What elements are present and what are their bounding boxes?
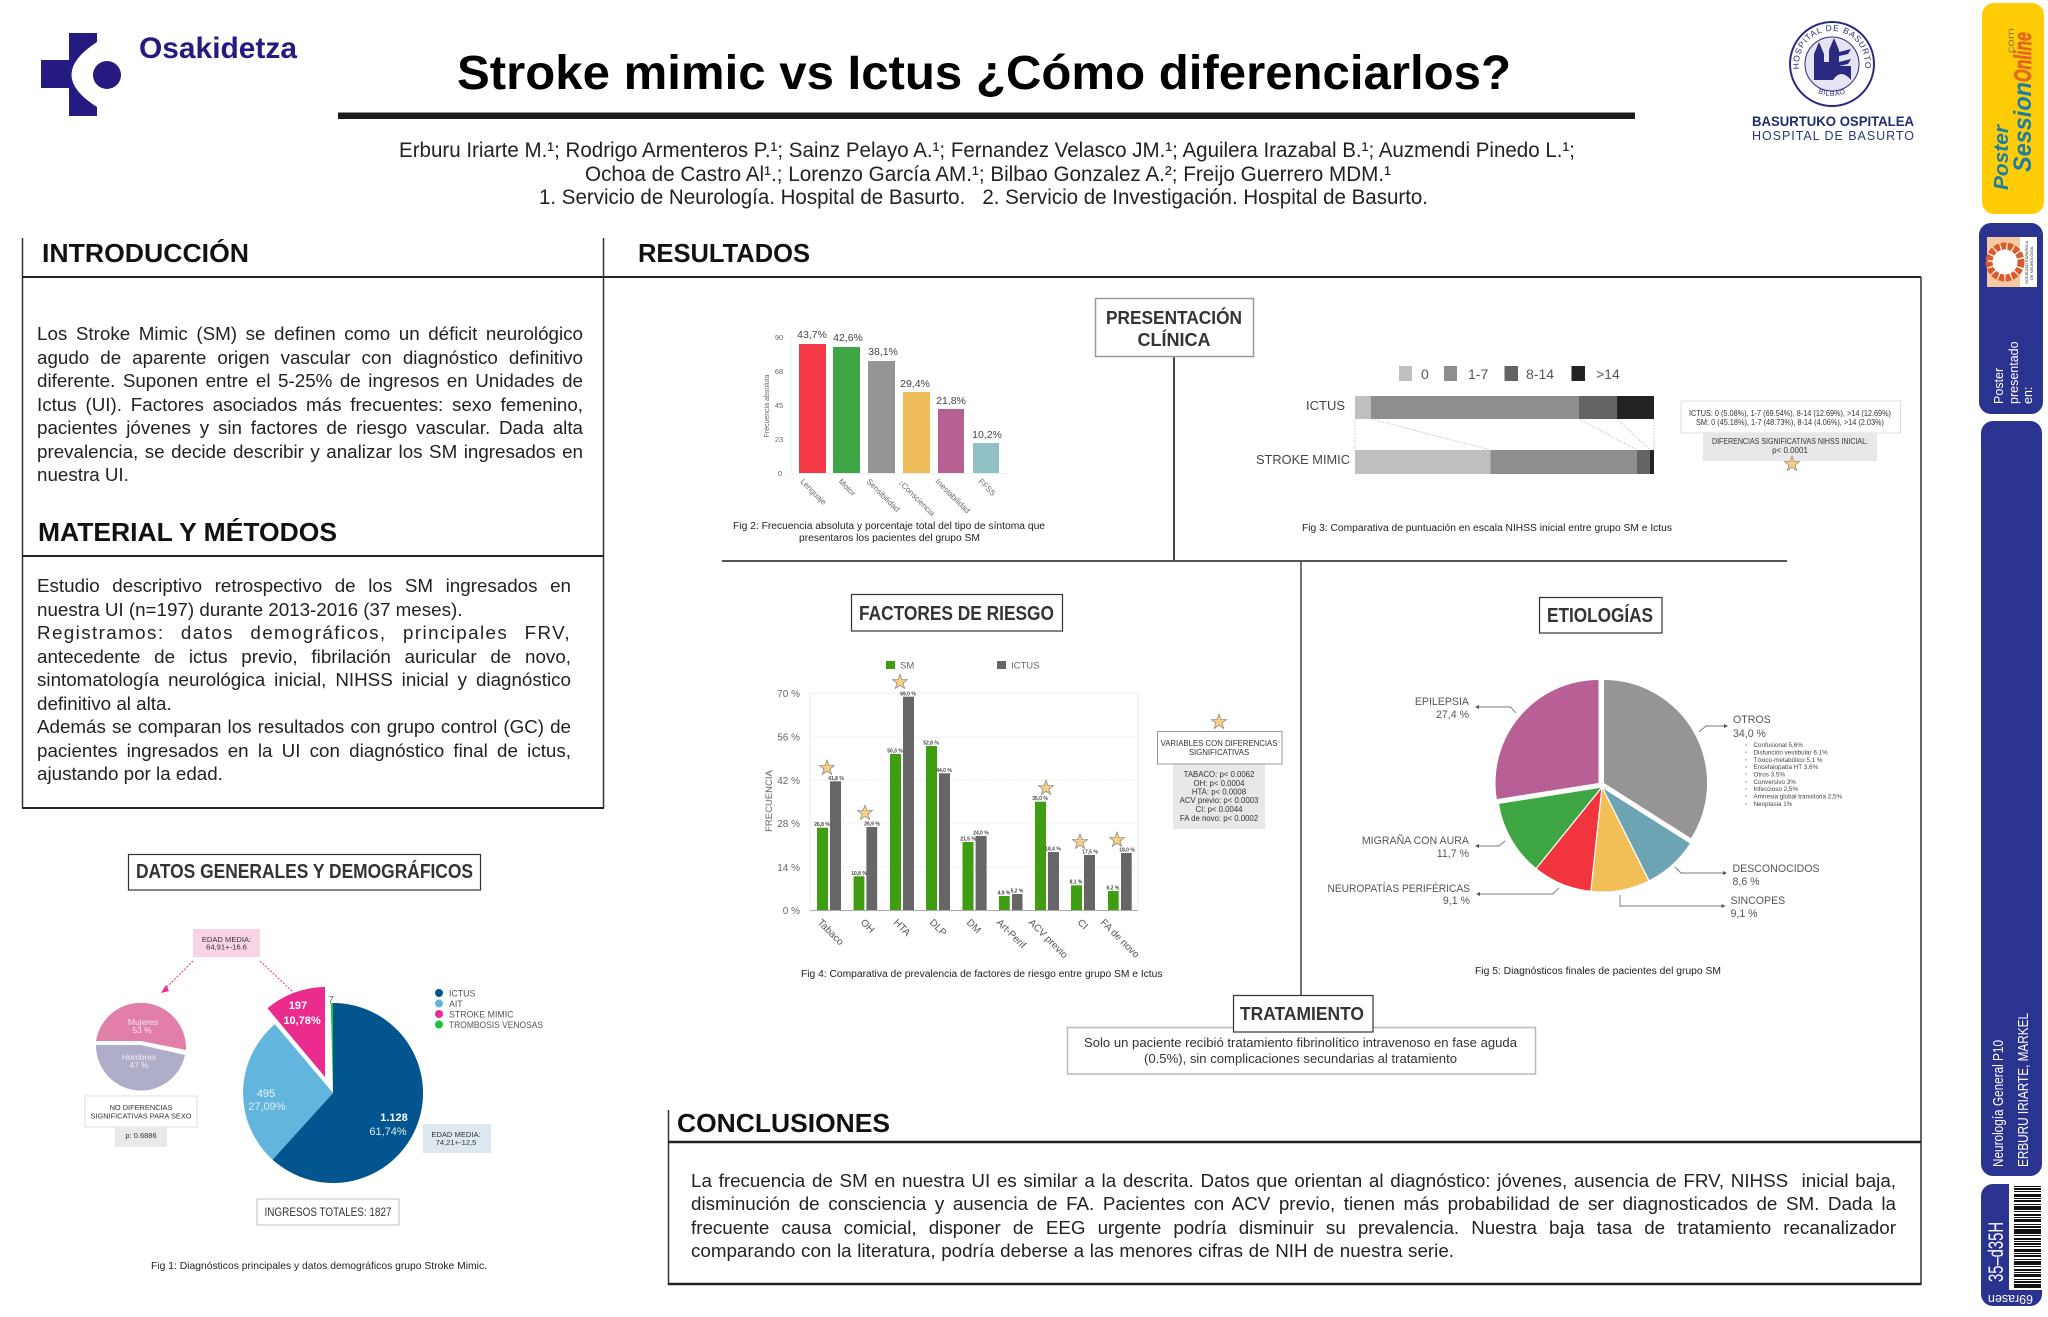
heading: tratamiento: TRATAMIENTO — [1240, 1004, 1364, 1024]
text block: material y métodos: Estudio descriptivo retrospectivo de los SM ingresados en — [37, 575, 571, 596]
bars — [799, 344, 999, 473]
sidebar: presented-at panel: presentado — [2007, 341, 2021, 404]
slice: migraña — [1498, 787, 1602, 869]
legend — [886, 660, 1040, 672]
callout: significant variables: CI: p< 0.0044 — [1195, 805, 1243, 814]
text block: introducción: prevalencia, se decide describir y analizar los SM ingresados en — [37, 440, 583, 462]
callout: NIHSS values: ICTUS: 0 (5.08%), 1-7 (69.54%), 8-14 (12.69%), >14 (12.69%) — [1689, 409, 1891, 418]
callout: NIHSS values: p< 0.0001 — [1772, 446, 1808, 455]
text block: material y métodos: Además se comparan los resultados con grupo control (GC) de — [37, 716, 571, 737]
text block: introducción: agudo de aparente origen vascular con diagnóstico definitivo — [37, 346, 583, 368]
chart: sex pie — [96, 1003, 186, 1091]
heading: conclusiones: CONCLUSIONES — [677, 1108, 890, 1138]
chart: sex pie: Hombres — [122, 1052, 156, 1062]
chart: figure 5 etiologies pie — [1328, 680, 1842, 920]
legend: diagnoses: STROKE MIMIC — [449, 1010, 514, 1020]
heading: factores de riesgo — [852, 594, 1062, 631]
x axis labels: ACV previo — [1026, 917, 1070, 961]
text block: material y métodos: Registramos: datos demográficos, principales FRV, — [37, 622, 571, 643]
slice labels: EPILEPSIA — [1415, 696, 1470, 708]
slice labels: OTROS — [1733, 714, 1771, 726]
chart: figure 4 risk factors: FRECUENCIA — [764, 769, 775, 832]
x axis labels: FFSS — [977, 477, 997, 498]
chart: diagnoses pie: 10,78% — [283, 1015, 321, 1027]
heading: presentación clínica: PRESENTACIÓN — [1106, 307, 1242, 328]
value labels: 42,6% — [833, 332, 863, 344]
stroke mimic bar: STROKE MIMIC — [1256, 452, 1350, 467]
otros breakdown list: Amnesia global transitoria 2,5% — [1754, 794, 1842, 800]
value labels: 5,2 % — [1011, 888, 1024, 894]
sidebar: presented-at panel: DE NEUROLOGÍA — [2029, 246, 2034, 280]
value labels: 10,2% — [972, 429, 1002, 441]
heading: etiologías — [1540, 598, 1662, 633]
callout: NIHSS values: SM: 0 (45.18%), 1-7 (48.73%), 8-14 (4.06%), >14 (2.03%) — [1696, 418, 1884, 427]
value labels: 41,8 % — [828, 776, 844, 782]
callout: significant variables — [1158, 714, 1282, 829]
heading: etiologías: ETIOLOGÍAS — [1547, 604, 1653, 627]
slice: sincopes — [1591, 787, 1649, 892]
value labels — [797, 329, 1002, 441]
authors and affiliations: Ochoa de Castro Al¹.; Lorenzo García AM.¹; Bilbao Gonzalez A.²; Freijo Guerrero MDM.¹ — [585, 163, 1391, 186]
heading: presentación clínica: CLÍNICA — [1138, 329, 1210, 350]
panel: tratamiento: Solo un paciente recibió tratamiento fibrinolítico intravenoso en fase aguda — [1084, 1035, 1518, 1050]
callout: significant variables: OH: p< 0.0004 — [1194, 779, 1245, 788]
callout: no differences by sex — [85, 1096, 197, 1147]
callout: no differences by sex: NO DIFERENCIAS — [110, 1103, 172, 1112]
callout: significant variables: TABACO: p< 0.0062 — [1184, 770, 1254, 779]
chart: diagnoses pie: 495 — [257, 1088, 275, 1100]
heading: tratamiento — [1234, 996, 1373, 1032]
value labels: 21,8% — [936, 395, 966, 407]
chart: sex pie: 47 % — [129, 1060, 149, 1070]
y axis labels: 42 % — [777, 776, 800, 787]
heading: datos generales — [128, 854, 480, 890]
otros breakdown list — [1745, 742, 1842, 808]
callout: no differences by sex: p: 0.6886 — [125, 1131, 157, 1140]
x axis labels: DM — [964, 917, 983, 936]
caption: figure 2: Fig 2: Frecuencia absoluta y porcentaje total del tipo de síntoma que — [733, 521, 1045, 532]
otros breakdown list: Confusional 5,6% — [1754, 742, 1803, 749]
SM bars — [817, 746, 1119, 910]
otros breakdown list: Neoplasia 1% — [1754, 801, 1793, 808]
value labels: 43,7% — [797, 329, 827, 341]
callout: edad media ictus — [423, 1124, 491, 1153]
y axis labels: 70 % — [777, 689, 800, 700]
panel: tratamiento: (0.5%), sin complicaciones secundarias al tratamiento — [1144, 1051, 1457, 1066]
x axis labels: OH — [858, 917, 876, 936]
chart: diagnoses pie: 1.128 — [380, 1112, 408, 1124]
x axis labels: FA de novo — [1098, 917, 1141, 961]
callout: significant variables: SIGNIFICATIVAS — [1189, 748, 1249, 757]
logo: Hospital de Basurto: BILBAO — [1818, 89, 1844, 96]
slice labels: DESCONOCIDOS — [1732, 863, 1820, 875]
callout: ingresos totales — [257, 1199, 399, 1225]
authors and affiliations — [399, 139, 1575, 209]
heading: datos generales: DATOS GENERALES Y DEMOGRÁFICOS — [136, 860, 473, 883]
caption: figure 4: Fig 4: Comparativa de prevalencia de factores de riesgo entre grupo SM e Ictus — [801, 969, 1162, 980]
text block: material y métodos: definitivo al alta. — [37, 692, 172, 714]
value labels: 18,4 % — [1045, 846, 1061, 852]
slice labels: SINCOPES — [1730, 895, 1785, 907]
text block: material y métodos — [37, 575, 571, 784]
x axis labels: Sensibilidad — [865, 477, 901, 514]
value labels: 29,4% — [900, 378, 930, 390]
logo: Hospital de Basurto: BASURTUKO OSPITALEA — [1752, 114, 1914, 129]
callout: edad media ictus: 74,21+-12,5 — [436, 1138, 476, 1147]
y axis labels: 68 — [775, 367, 783, 376]
slice labels: 34,0 % — [1733, 728, 1767, 740]
value labels: 35,0 % — [1032, 796, 1048, 802]
sidebar: presented-at panel: SOCIEDAD ESPAÑOLA — [2024, 240, 2029, 284]
slice labels: 8,6 % — [1732, 876, 1760, 888]
slice labels: 27,4 % — [1436, 709, 1470, 721]
panel: datos generales y demográficos — [85, 854, 543, 1272]
chart: diagnoses pie: 27,09% — [248, 1101, 286, 1113]
slice labels: MIGRAÑA CON AURA — [1362, 834, 1470, 847]
text block: introducción: Ictus (UI). Factores asociados más frecuentes: sexo femenino, — [37, 394, 583, 414]
value labels: 26,8 % — [814, 822, 830, 828]
authors and affiliations: Erburu Iriarte M.¹; Rodrigo Armenteros P.¹; Sainz Pelayo A.¹; Fernandez Velasco JM.¹; Aguilera Irazabal B.¹; Auzmendi Pinedo L.¹; — [399, 139, 1575, 162]
arrows: dotted connectors — [161, 961, 293, 993]
chart: sex pie: Mujeres — [128, 1017, 158, 1027]
text block: conclusiones: La frecuencia de SM en nuestra UI es similar a la descrita. Datos que orientan al diagnóstico: jóvenes, ausencia de FRV, NIHSS inicial baja, — [691, 1170, 1896, 1191]
text block: conclusiones: comparando con la literatura, podría deberse a las menores cifras de NIH de nuestra serie. — [691, 1240, 1454, 1261]
sidebar: barcode panel — [1981, 1184, 2042, 1307]
callout: edad media stroke mimic: EDAD MEDIA: — [202, 935, 251, 944]
y axis labels: 0 — [778, 469, 782, 478]
sidebar: PosterSessionOnline badge — [1982, 3, 2044, 214]
significance stars — [819, 674, 1125, 848]
y axis labels: 90 — [775, 333, 783, 342]
value labels: 26,9 % — [864, 822, 880, 828]
chart: diagnoses pie: 61,74% — [369, 1126, 407, 1138]
sidebar: PosterSessionOnline badge: Session — [2009, 82, 2037, 172]
chart: diagnoses pie: 197 — [289, 1000, 307, 1012]
text block: material y métodos: antecedente de ictus previo, fibrilación auricular de novo, — [37, 646, 571, 666]
authors and affiliations: 1. Servicio de Neurología. Hospital de Basurto. 2. Servicio de Investigación. Hospital de Basurto. — [539, 186, 1428, 209]
chart: figure 2 symptom bars — [762, 329, 1007, 518]
sidebar: session and author panel: Neurología General P10 — [1991, 1040, 2007, 1167]
logo: Osakidetza: Osakidetza — [139, 32, 297, 65]
ictus bar — [1306, 396, 1654, 419]
logo: Hospital de Basurto: HOSPITAL DE BASURTO — [1793, 25, 1871, 69]
panel: tratamiento — [1068, 996, 1536, 1074]
slice labels — [1328, 696, 1820, 920]
heading: factores de riesgo: FACTORES DE RIESGO — [859, 603, 1054, 625]
caption: figure 2: presentaros los pacientes del grupo SM — [799, 533, 980, 544]
text block: material y métodos: sintomatología neurológica inicial, NIHSS inicial y diagnóstico — [37, 669, 571, 690]
x axis labels: Inestabilidad — [934, 477, 972, 515]
y axis labels: 28 % — [777, 819, 800, 830]
value labels: 17,5 % — [1082, 850, 1098, 856]
value labels: 10,8 % — [851, 871, 867, 877]
heading: Introducción: INTRODUCCIÓN — [42, 238, 249, 268]
y axis labels: 45 — [775, 401, 783, 410]
text block: introducción: pacientes jóvenes y sin factores de riesgo vascular. Dada alta — [37, 417, 583, 438]
text block: conclusiones: frecuente causa comicial, disponer de EEG urgente podría disminuir su prevalencia. Nuestra baja tasa de tratamiento recanalizador — [691, 1217, 1896, 1238]
slice: otros — [1604, 680, 1707, 838]
value labels: 50,3 % — [887, 748, 903, 754]
caption: figure 2 — [733, 521, 1045, 544]
sidebar: presented-at panel — [1979, 223, 2043, 414]
slice labels: 11,7 % — [1437, 848, 1470, 860]
sidebar: PosterSessionOnline badge: Online — [2010, 32, 2037, 82]
legend: diagnoses: TROMBOSIS VENOSAS — [449, 1020, 543, 1030]
text block: introducción: diferente. Suponen entre el 5-25% de ingresos en Unidades de — [37, 370, 583, 391]
chart: diagnoses pie: 7 — [328, 995, 334, 1006]
value labels — [814, 692, 1135, 896]
chart: sex pie: 53 % — [132, 1025, 152, 1035]
slice: neuropatías — [1536, 787, 1602, 891]
legend: 1-7 — [1468, 366, 1488, 382]
sidebar: PosterSessionOnline badge: .com — [2006, 28, 2017, 57]
value labels: 69,0 % — [900, 692, 916, 698]
value labels: 24,0 % — [973, 830, 989, 836]
otros breakdown list: Encefalopatía HT 3,6% — [1754, 764, 1819, 771]
otros breakdown list: Tóxico-metabólico 5,1 % — [1754, 757, 1823, 764]
sidebar: session and author panel: ERBURU IRIARTE, MARKEL — [2016, 1013, 2032, 1167]
sidebar: barcode panel: 35–d35H — [1985, 1222, 2008, 1282]
value labels: 4,9 % — [998, 890, 1011, 896]
callout: NIHSS values: DIFERENCIAS SIGNIFICATIVAS NIHSS INICIAL: — [1712, 437, 1868, 446]
legend: diagnoses — [435, 988, 543, 1030]
stroke mimic bar — [1256, 450, 1654, 474]
x axis labels: HTA — [891, 917, 913, 939]
legend: diagnoses: AIT — [449, 999, 463, 1009]
otros breakdown list: Otros 3.5% — [1754, 772, 1785, 778]
otros breakdown list: Conversivo 3% — [1754, 779, 1796, 786]
x axis labels: Art-Perif — [994, 917, 1028, 951]
caption: figure 5: Fig 5: Diagnósticos finales de pacientes del grupo SM — [1475, 966, 1721, 977]
y axis labels — [777, 689, 800, 917]
text block: conclusiones: disminución de consciencia y ausencia de FA. Pacientes con ACV previo, tienen más probabilidad de ser diagnosticados de SM. Dada la — [691, 1193, 1896, 1214]
value labels: 21,5 % — [960, 836, 976, 842]
value labels: 38,1% — [868, 346, 898, 358]
callout: edad media stroke mimic — [193, 929, 260, 957]
chart: diagnoses pie — [243, 987, 423, 1183]
text block: introducción — [37, 323, 583, 485]
callout: significant variables: VARIABLES CON DIFERENCIAS — [1161, 739, 1277, 748]
chart: figure 4 risk factors — [764, 660, 1141, 961]
panel: sidebar — [1979, 3, 2044, 1307]
sidebar: session and author panel — [1981, 421, 2042, 1176]
y axis labels — [762, 333, 783, 478]
callout: NIHSS values — [1681, 401, 1900, 470]
callout: no differences by sex: SIGNIFICATIVAS PARA SEXO — [90, 1112, 192, 1120]
legend: 0 — [1421, 366, 1429, 382]
callout: edad media ictus: EDAD MEDIA: — [431, 1130, 481, 1139]
x axis labels: Motor — [837, 477, 858, 498]
callout: significant variables: ACV previo: p< 0.0003 — [1180, 796, 1258, 805]
y axis labels: 56 % — [777, 732, 800, 744]
value labels: 52,8 % — [923, 740, 939, 746]
x axis labels — [815, 917, 1141, 961]
legend: >14 — [1596, 366, 1620, 382]
sidebar: presented-at panel: Poster — [1992, 368, 2006, 404]
sidebar: presented-at panel: en: — [2021, 387, 2035, 404]
x axis labels: CI — [1075, 917, 1090, 932]
callout: significant variables: FA de novo: p< 0.0002 — [1180, 814, 1258, 823]
value labels: 44,0 % — [936, 768, 952, 774]
x axis labels: Tabaco — [815, 917, 846, 948]
text block: conclusiones — [691, 1170, 1896, 1261]
slice labels: NEUROPATÍAS PERIFÉRICAS — [1328, 882, 1470, 895]
callout: edad media stroke mimic: 64,91+-16.6 — [206, 942, 247, 952]
heading: presentación clínica — [1096, 298, 1254, 356]
slice: desconocidos — [1602, 787, 1691, 881]
y axis labels: Frecuencia absoluta — [762, 374, 771, 438]
legend: 8-14 — [1526, 366, 1554, 382]
otros breakdown list: Disfunción vestibular 6.1% — [1754, 750, 1828, 756]
y axis labels: 23 — [775, 435, 783, 444]
value labels: 18,0 % — [1119, 848, 1135, 854]
ictus bar: ICTUS — [1306, 398, 1345, 413]
logo: Osakidetza — [41, 32, 297, 116]
x axis labels: ↓Consciencia — [897, 478, 937, 518]
text block: material y métodos: nuestra UI (n=197) durante 2013-2016 (37 meses). — [37, 598, 462, 620]
legend: SM — [900, 660, 914, 672]
x axis labels — [799, 477, 997, 518]
sidebar: barcode panel: 69rasen — [1988, 1292, 2033, 1307]
text block: introducción: Los Stroke Mimic (SM) se definen como un déficit neurológico — [37, 323, 583, 344]
logo: Hospital de Basurto: HOSPITAL DE BASURTO — [1752, 129, 1914, 143]
text block: material y métodos: ajustando por la edad. — [37, 763, 223, 784]
ictus bars — [830, 697, 1132, 910]
legend: diagnoses: ICTUS — [449, 988, 476, 998]
slice: epilepsia — [1496, 680, 1598, 799]
callout: ingresos totales: INGRESOS TOTALES: 1827 — [264, 1207, 392, 1219]
legend: ICTUS — [1011, 660, 1040, 672]
value labels: 6,2 % — [1107, 886, 1120, 892]
legend — [1399, 366, 1620, 382]
slice labels: 9,1 % — [1730, 908, 1758, 920]
slice labels: 9,1 % — [1443, 895, 1471, 907]
y axis labels: 0 % — [783, 906, 800, 917]
text block: material y métodos: pacientes ingresados en la UI con diagnóstico final de ictus, — [37, 740, 571, 760]
callout: significant variables: HTA: p< 0.0008 — [1192, 788, 1246, 796]
x axis labels: Lenguaje — [799, 477, 829, 507]
sidebar: PosterSessionOnline badge: Poster — [1991, 124, 2013, 190]
caption: figure 1: Fig 1: Diagnósticos principales y datos demográficos grupo Stroke Mimic. — [151, 1260, 487, 1272]
heading: Material y métodos: MATERIAL Y MÉTODOS — [38, 517, 337, 547]
title: Stroke mimic vs Ictus ¿Cómo diferenciarlos? — [457, 47, 1511, 100]
x axis labels: DLP — [927, 917, 949, 939]
heading: Resultados: RESULTADOS — [638, 238, 810, 268]
leader arrows — [1477, 707, 1726, 906]
otros breakdown list: Infeccioso 2,5% — [1754, 786, 1798, 793]
caption: figure 3: Fig 3: Comparativa de puntuación en escala NIHSS inicial entre grupo SM e Ictus — [1302, 523, 1672, 534]
value labels: 8,1 % — [1070, 880, 1083, 886]
text block: introducción: nuestra UI. — [37, 464, 129, 485]
y axis labels: 14 % — [777, 863, 800, 874]
chart: figure 3 NIHSS stacked bars — [1256, 366, 1654, 474]
logo: Hospital de Basurto — [1752, 21, 1914, 143]
